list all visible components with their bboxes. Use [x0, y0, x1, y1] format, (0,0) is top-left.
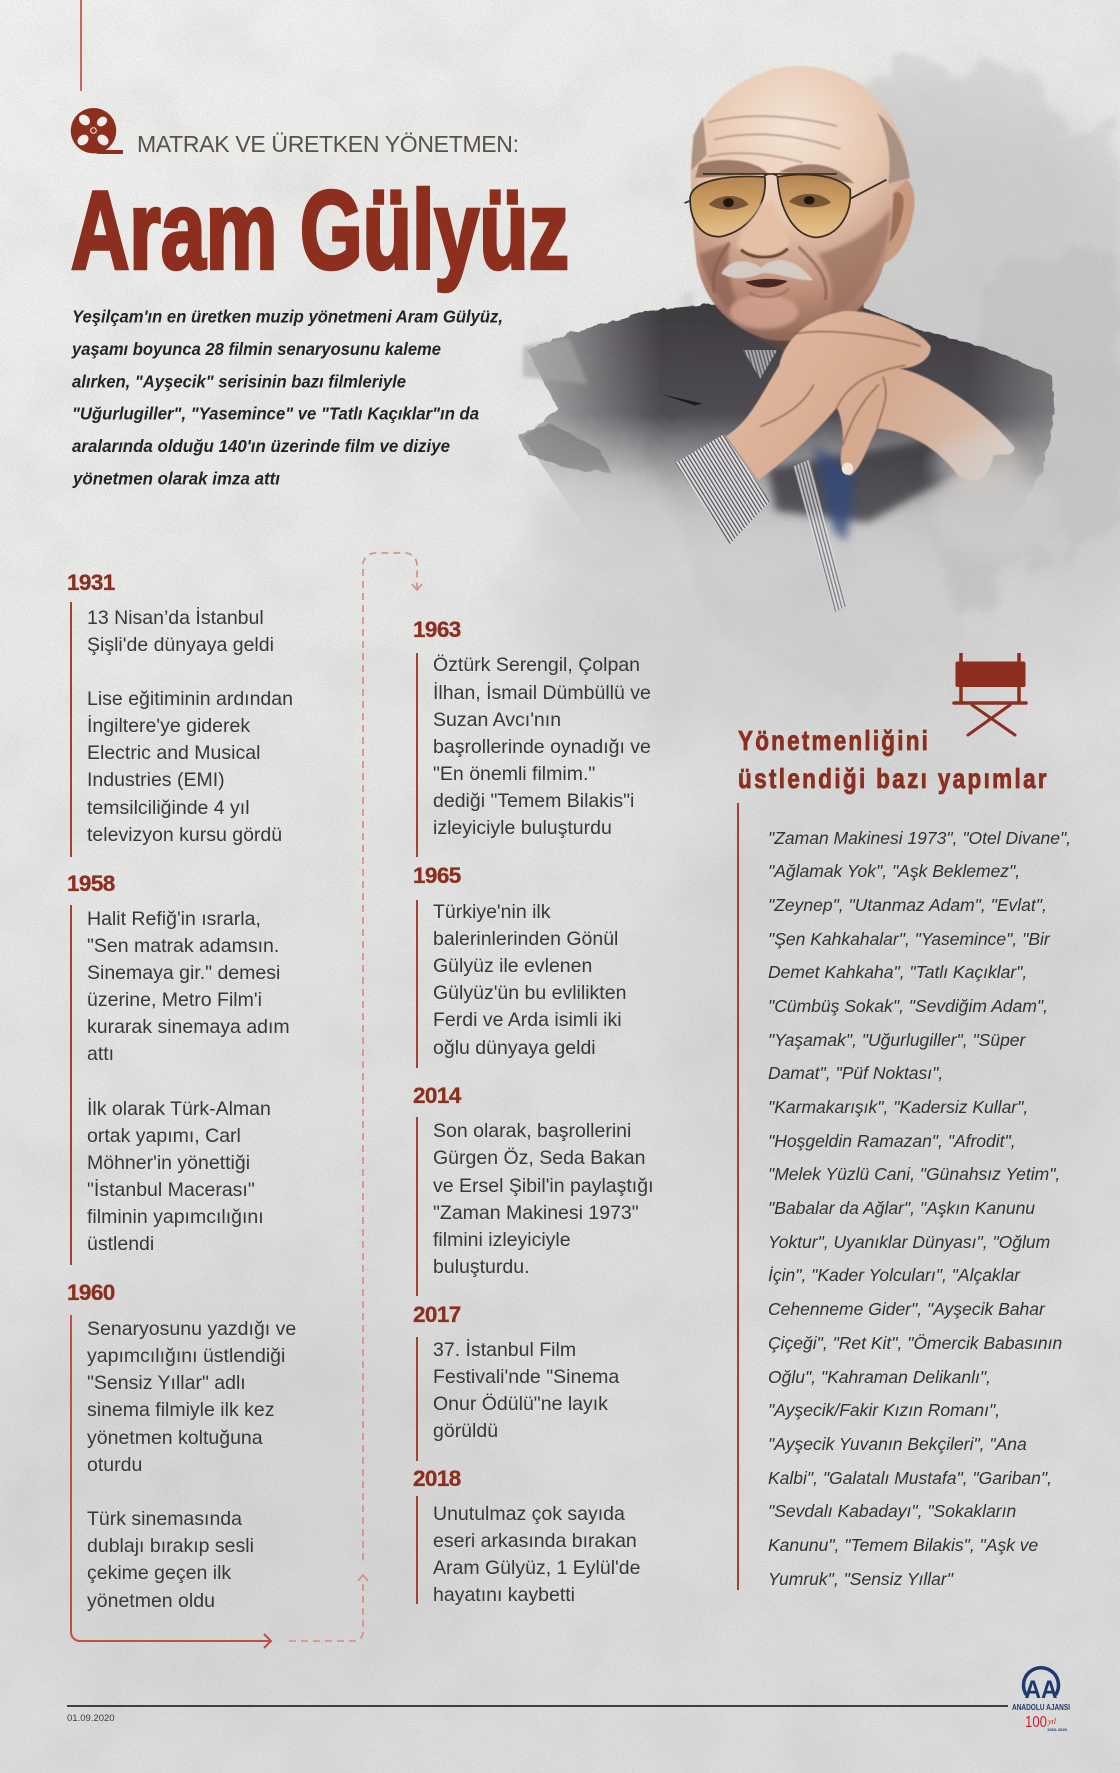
text: 13 Nisan’da İstanbul	[87, 606, 264, 628]
logo: Anadolu Ajansı: 100	[1025, 1714, 1047, 1731]
text: 1960	[67, 1280, 115, 1305]
film list: Cehenneme Gider", "Ayşecik Bahar	[768, 1299, 1045, 1319]
film list: "Sevdalı Kabadayı", "Sokakların	[768, 1501, 1016, 1521]
film list: Kanunu", "Temem Bilakis", "Aşk ve	[768, 1535, 1038, 1555]
text: Industries (EMI)	[87, 769, 225, 791]
text: İlhan, İsmail Dümbüllü ve	[433, 682, 651, 704]
heading: films directed: üstlendiği bazı yapımlar	[738, 764, 1047, 795]
moustache	[721, 260, 813, 280]
text: Gürgen Öz, Seda Bakan	[433, 1147, 645, 1169]
timeline 1958	[67, 870, 290, 1255]
intro paragraph: yaşamı boyunca 28 filmin senaryosunu kaleme	[71, 339, 441, 359]
forehead wrinkles	[709, 116, 841, 162]
finger lines	[760, 332, 921, 446]
text: Son olarak, başrollerini	[433, 1120, 631, 1142]
cuff	[675, 434, 770, 544]
text: Suzan Avcı'nın	[433, 709, 561, 731]
text: 1963	[413, 617, 461, 642]
text: filminin yapımcılığını	[87, 1206, 264, 1228]
shadow below hands	[768, 438, 959, 522]
text: görüldü	[433, 1420, 498, 1442]
text: Unutulmaz çok sayıda	[433, 1502, 625, 1524]
blue tie	[814, 446, 856, 541]
hands	[726, 311, 1015, 480]
film list: "Şen Kahkahalar", "Yasemince", "Bir	[768, 929, 1050, 949]
heading: films directed	[738, 726, 1047, 795]
text: Türk sinemasında	[87, 1508, 242, 1530]
head	[691, 66, 909, 341]
text: Gülyüz ile evlenen	[433, 955, 592, 977]
film list: "Yaşamak", "Uğurlugiller", "Süper	[768, 1030, 1025, 1050]
film list: İçin", "Kader Yolcuları", "Alçaklar	[768, 1265, 1020, 1285]
hair at temple	[877, 113, 909, 184]
intro paragraph	[71, 306, 503, 488]
text: Senaryosunu yazdığı ve	[87, 1318, 296, 1340]
text: balerinlerinden Gönül	[433, 928, 618, 950]
mouth	[745, 279, 788, 288]
nose	[737, 201, 789, 256]
timeline 1931	[67, 570, 293, 846]
text: Electric and Musical	[87, 742, 260, 764]
film list: Yoktur", Uyanıklar Dünyası", "Oğlum	[768, 1232, 1050, 1252]
intro paragraph: aralarında olduğu 140'ın üzerinde film ve diziye	[72, 436, 450, 456]
text: oğlu dünyaya geldi	[433, 1037, 596, 1059]
text: üzerine, Metro Film'i	[87, 989, 262, 1011]
date: 01.09.2020	[67, 1713, 115, 1724]
logo: Anadolu Ajansı: AA	[1024, 1676, 1058, 1704]
film list: "Zeynep", "Utanmaz Adam", "Evlat",	[768, 895, 1047, 915]
text: Lise eğitiminin ardından	[87, 688, 293, 710]
icon: director's chair	[952, 653, 1028, 737]
bottom fog	[929, 472, 1059, 557]
text: Türkiye'nin ilk	[433, 901, 551, 923]
jacket	[522, 303, 1055, 524]
collar	[743, 350, 777, 379]
glasses	[684, 174, 887, 237]
text: buluşturdu.	[433, 1256, 529, 1278]
top accent line	[80, 0, 82, 91]
text: 2017	[413, 1302, 461, 1326]
film list: Damat", "Püf Noktası",	[768, 1063, 943, 1083]
text: 2018	[413, 1466, 461, 1491]
film list: "Cümbüş Sokak", "Sevdiğim Adam",	[768, 996, 1048, 1016]
ear	[877, 178, 915, 265]
left sleeve wash	[517, 423, 611, 472]
text: Aram Gülyüz, 1 Eylül'de	[433, 1557, 640, 1579]
text: "Sensiz Yıllar" adlı	[87, 1372, 246, 1394]
text: televizyon kursu gördü	[87, 824, 282, 846]
text: Festivali'nde "Sinema	[433, 1366, 619, 1388]
timeline 1965	[413, 863, 626, 1059]
text: İlk olarak Türk-Alman	[87, 1098, 271, 1120]
text: temsilciliğinde 4 yıl	[87, 797, 250, 819]
text: "En önemli filmim."	[433, 763, 595, 785]
text: "İstanbul Macerası"	[87, 1179, 255, 1201]
timeline 2014	[413, 1083, 654, 1278]
right hand fade	[932, 434, 1024, 495]
film list bar	[737, 803, 739, 1590]
cheek folds	[713, 243, 826, 300]
text: Möhner'in yönettiği	[87, 1152, 250, 1174]
film list: "Ayşecik/Fakir Kızın Romanı",	[768, 1400, 1000, 1420]
text: "Sen matrak adamsın.	[87, 935, 279, 957]
film list: Kalbi", "Galatalı Mustafa", "Gariban",	[768, 1468, 1052, 1488]
text: hayatını kaybetti	[433, 1584, 575, 1606]
text: kurarak sinemaya adım	[87, 1016, 290, 1038]
timeline 2017	[413, 1302, 620, 1442]
logo: Anadolu Ajansı: 1920-2020	[1047, 1727, 1068, 1732]
timeline 1963	[413, 617, 651, 839]
text: izleyiciyle buluşturdu	[433, 817, 612, 839]
heading: kicker: MATRAK VE ÜRETKEN YÖNETMEN:	[137, 131, 519, 157]
text: yönetmen oldu	[87, 1590, 215, 1612]
text: ortak yapımı, Carl	[87, 1125, 241, 1147]
film list: "Babalar da Ağlar", "Aşkın Kanunu	[768, 1198, 1035, 1218]
film list: "Zaman Makinesi 1973", "Otel Divane",	[768, 828, 1071, 848]
film list: "Karmakarışık", "Kadersiz Kullar",	[768, 1097, 1028, 1117]
text: Halit Refiğ'in ısrarla,	[87, 908, 261, 930]
text: 1965	[413, 863, 461, 888]
intro paragraph: "Uğurlugiller", "Yasemince" ve "Tatlı Kaçıklar"ın da	[72, 404, 479, 424]
intro paragraph: yönetmen olarak imza attı	[72, 468, 280, 488]
film list: Yumruk", "Sensiz Yıllar"	[768, 1569, 953, 1589]
film list: "Hoşgeldin Ramazan", "Afrodit",	[768, 1131, 1016, 1151]
film list: "Ağlamak Yok", "Aşk Beklemez",	[768, 861, 1020, 881]
text: İngiltere'ye giderek	[87, 715, 250, 737]
text: filmini izleyiciyle	[433, 1229, 571, 1251]
icon: film reel	[70, 108, 123, 154]
text: dediği "Temem Bilakis"i	[433, 790, 634, 812]
title: Aram Gülyüz	[71, 168, 569, 292]
text: çekime geçen ilk	[87, 1562, 231, 1584]
logo: Anadolu Ajansı: yıl	[1047, 1717, 1057, 1726]
text: "Zaman Makinesi 1973"	[433, 1202, 639, 1224]
text: Onur Ödülü"ne layık	[433, 1393, 608, 1415]
text: 2014	[413, 1083, 461, 1108]
film list	[768, 828, 1071, 1589]
text: Öztürk Serengil, Çolpan	[433, 654, 640, 676]
text: 1931	[67, 570, 115, 595]
text: yapımcılığını üstlendiği	[87, 1345, 285, 1367]
text: Sinemaya gir." demesi	[87, 962, 280, 984]
text: 37. İstanbul Film	[433, 1338, 576, 1360]
film list: Oğlu", "Kahraman Delikanlı",	[768, 1366, 991, 1386]
text: başrollerinde oynadığı ve	[433, 736, 651, 758]
intro paragraph: alırken, "Ayşecik" serisinin bazı filmleriyle	[72, 371, 406, 391]
heading: films directed: Yönetmenliğini	[738, 726, 928, 757]
text: sinema filmiyle ilk kez	[87, 1399, 274, 1421]
text: ve Ersel Şibil'in paylaştığı	[433, 1174, 654, 1196]
text: üstlendi	[87, 1233, 154, 1255]
striped tie	[793, 459, 846, 612]
text: Gülyüz'ün bu evlilikten	[433, 982, 626, 1004]
text: Ferdi ve Arda isimli iki	[433, 1009, 622, 1031]
film list: "Melek Yüzlü Cani, "Günahsız Yetim",	[768, 1164, 1060, 1184]
logo: Anadolu Ajansı: ANADOLU AJANSI	[1012, 1702, 1070, 1712]
neck	[745, 300, 864, 354]
text: yönetmen koltuğuna	[87, 1427, 263, 1449]
text: attı	[87, 1043, 114, 1065]
lower face shading	[699, 243, 745, 323]
text: Şişli'de dünyaya geldi	[87, 634, 274, 656]
text: oturdu	[87, 1454, 142, 1476]
timeline 1960	[67, 1280, 296, 1612]
film list: "Ayşecik Yuvanın Bekçileri", "Ana	[768, 1434, 1027, 1454]
film list: Demet Kahkaha", "Tatlı Kaçıklar",	[768, 962, 1027, 982]
timeline 2018	[413, 1466, 640, 1606]
portrait of Aram Gülyüz	[518, 66, 1055, 612]
lapel line	[661, 394, 703, 405]
brow shadow	[695, 160, 854, 184]
intro paragraph: Yeşilçam'ın en üretken muzip yönetmeni Aram Gülyüz,	[72, 306, 503, 326]
text: 1958	[67, 870, 115, 896]
footer rule	[67, 1705, 1008, 1706]
film list: Çiçeği", "Ret Kit", "Ömercik Babasının	[768, 1333, 1062, 1353]
text: dublajı bırakıp sesli	[87, 1535, 254, 1557]
text: eseri arkasında bırakan	[433, 1530, 637, 1552]
